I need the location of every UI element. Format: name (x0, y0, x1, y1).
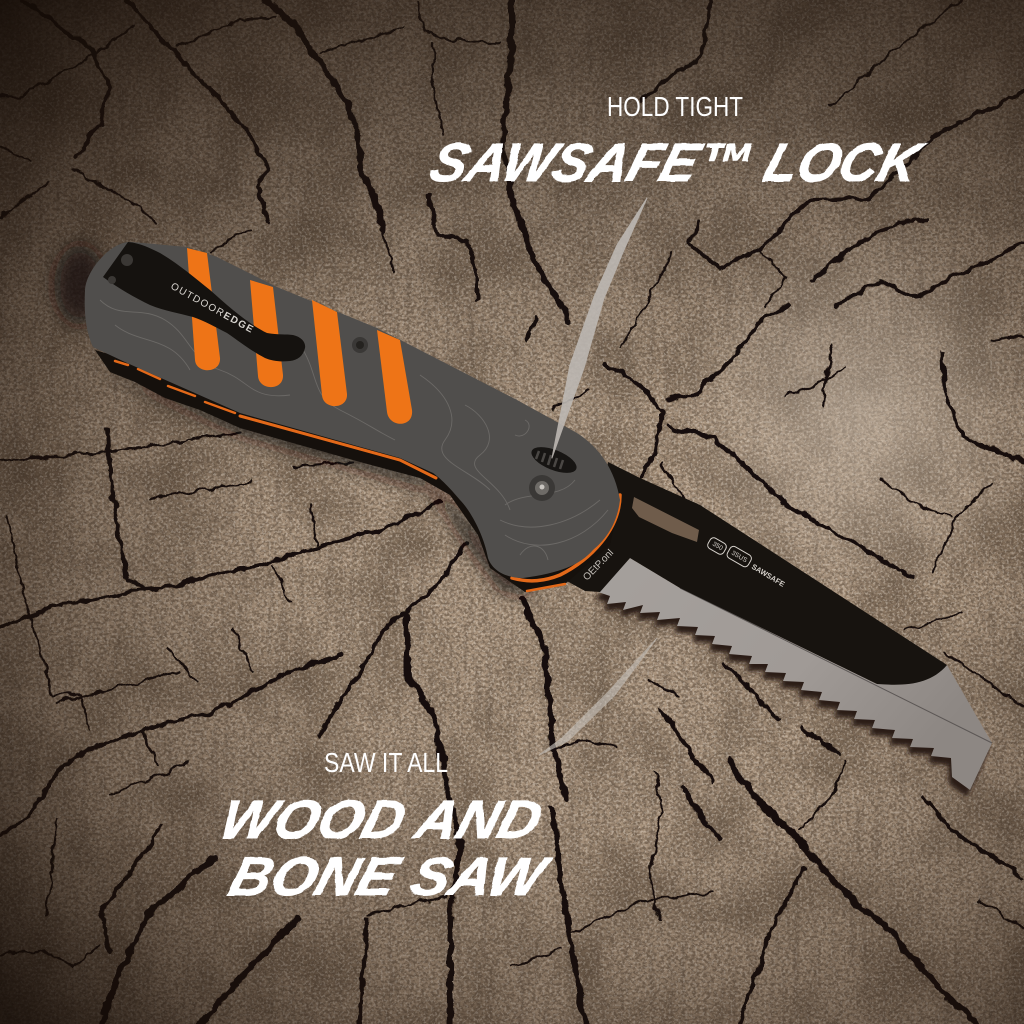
pocket clip (103, 242, 305, 361)
lock slider (528, 442, 580, 478)
pivot screw (529, 475, 555, 501)
folding saw knife (54, 242, 992, 797)
saw blade (565, 462, 992, 797)
saw blade: 350 (711, 541, 724, 552)
grey handle (85, 242, 620, 578)
callout line: lock (552, 198, 647, 458)
heading: wood and bone saw (214, 789, 556, 907)
label: hold tight: HOLD TIGHT (607, 91, 743, 122)
handle screw (352, 337, 368, 353)
saw blade: SAWSAFE (750, 562, 786, 589)
heading: sawsafe lock: SAWSAFE™ LOCK (424, 132, 931, 193)
topographic texture (100, 300, 608, 560)
handle underside (95, 350, 620, 592)
knife shadow (54, 245, 540, 600)
callout line: saw (539, 638, 657, 755)
orange liner (115, 361, 620, 591)
heading: wood and bone saw: WOOD AND (214, 789, 549, 850)
pocket clip: OUTDOOREDGE (169, 281, 256, 336)
blade slot (632, 497, 699, 542)
label: saw it all: SAW IT ALL (324, 747, 448, 778)
saw blade: 3SUS (730, 550, 749, 565)
blade marking (706, 536, 753, 568)
saw blade: OEtP.onl (581, 548, 616, 583)
orange grip stripes (187, 248, 412, 424)
heading: wood and bone saw: BONE SAW (223, 846, 556, 907)
